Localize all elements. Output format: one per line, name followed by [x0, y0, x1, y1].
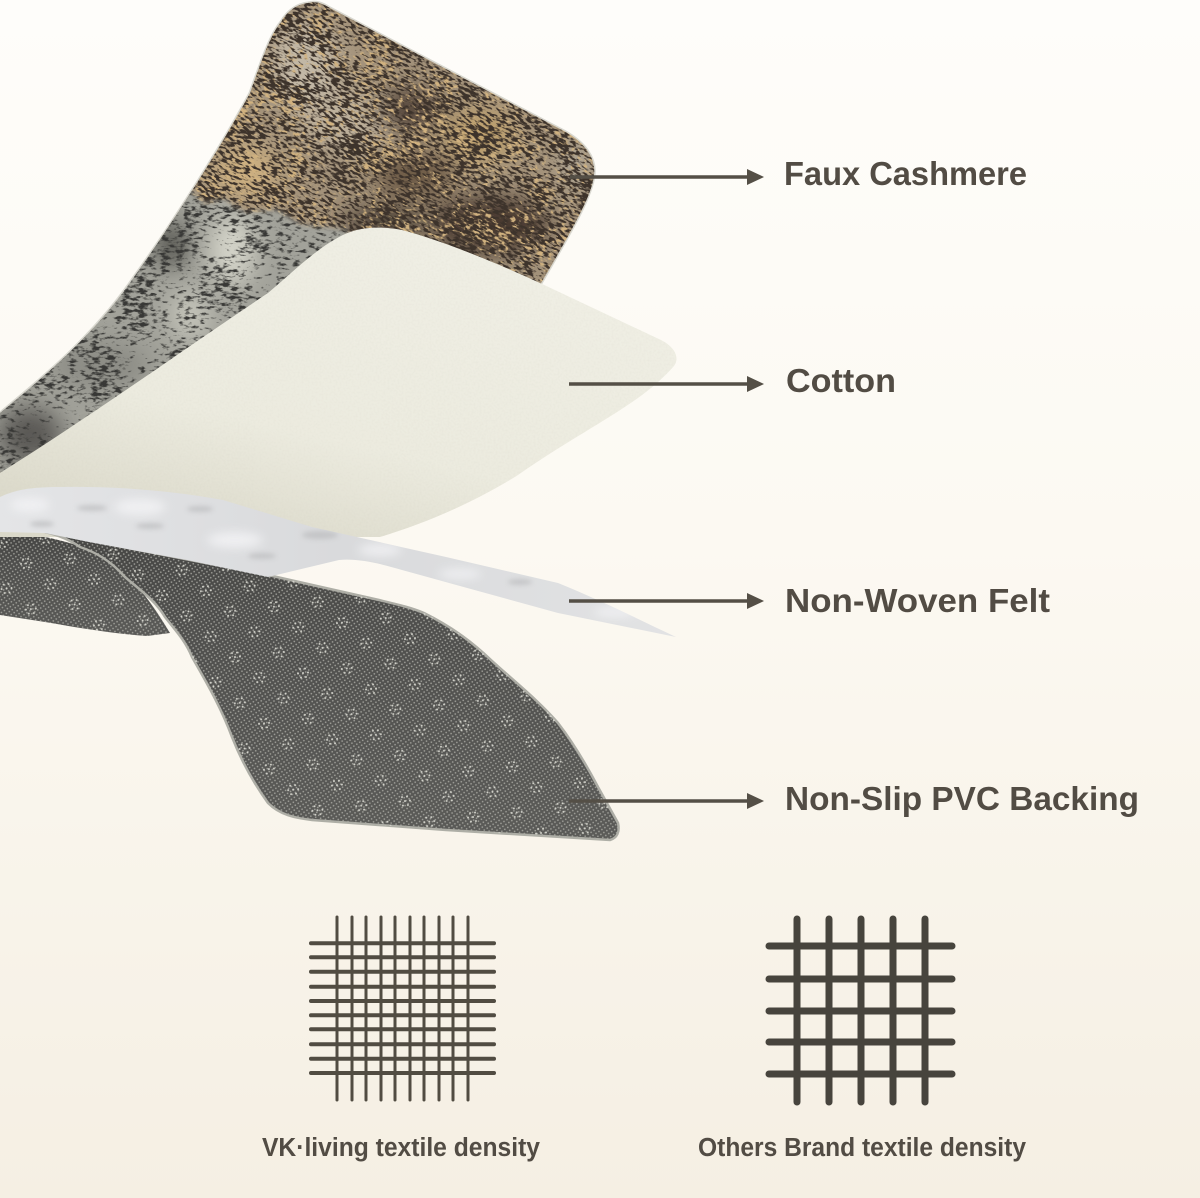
- label: cotton: Cotton: [786, 363, 896, 400]
- arrow: non-slip PVC backing: [569, 793, 764, 809]
- caption: VK-living textile density: VK·living textile density: [262, 1134, 541, 1162]
- arrow: cotton: [569, 376, 764, 392]
- layer: cotton: [0, 228, 676, 537]
- icon: VK-living dense textile grid: [311, 917, 494, 1100]
- arrow: non-woven felt: [569, 593, 764, 609]
- arrow: faux cashmere: [570, 169, 764, 185]
- label: faux cashmere: Faux Cashmere: [784, 156, 1027, 193]
- icon: other brand loose textile grid: [769, 919, 952, 1102]
- label: non-slip PVC backing: Non-Slip PVC Backing: [785, 781, 1139, 818]
- caption: others brand textile density: Others Brand textile density: [698, 1134, 1027, 1162]
- label: non-woven felt: Non-Woven Felt: [785, 583, 1050, 620]
- layer: non-slip PVC backing: [0, 532, 619, 840]
- layer: non-woven felt: [0, 487, 676, 637]
- layer: faux cashmere surface: [0, 0, 596, 473]
